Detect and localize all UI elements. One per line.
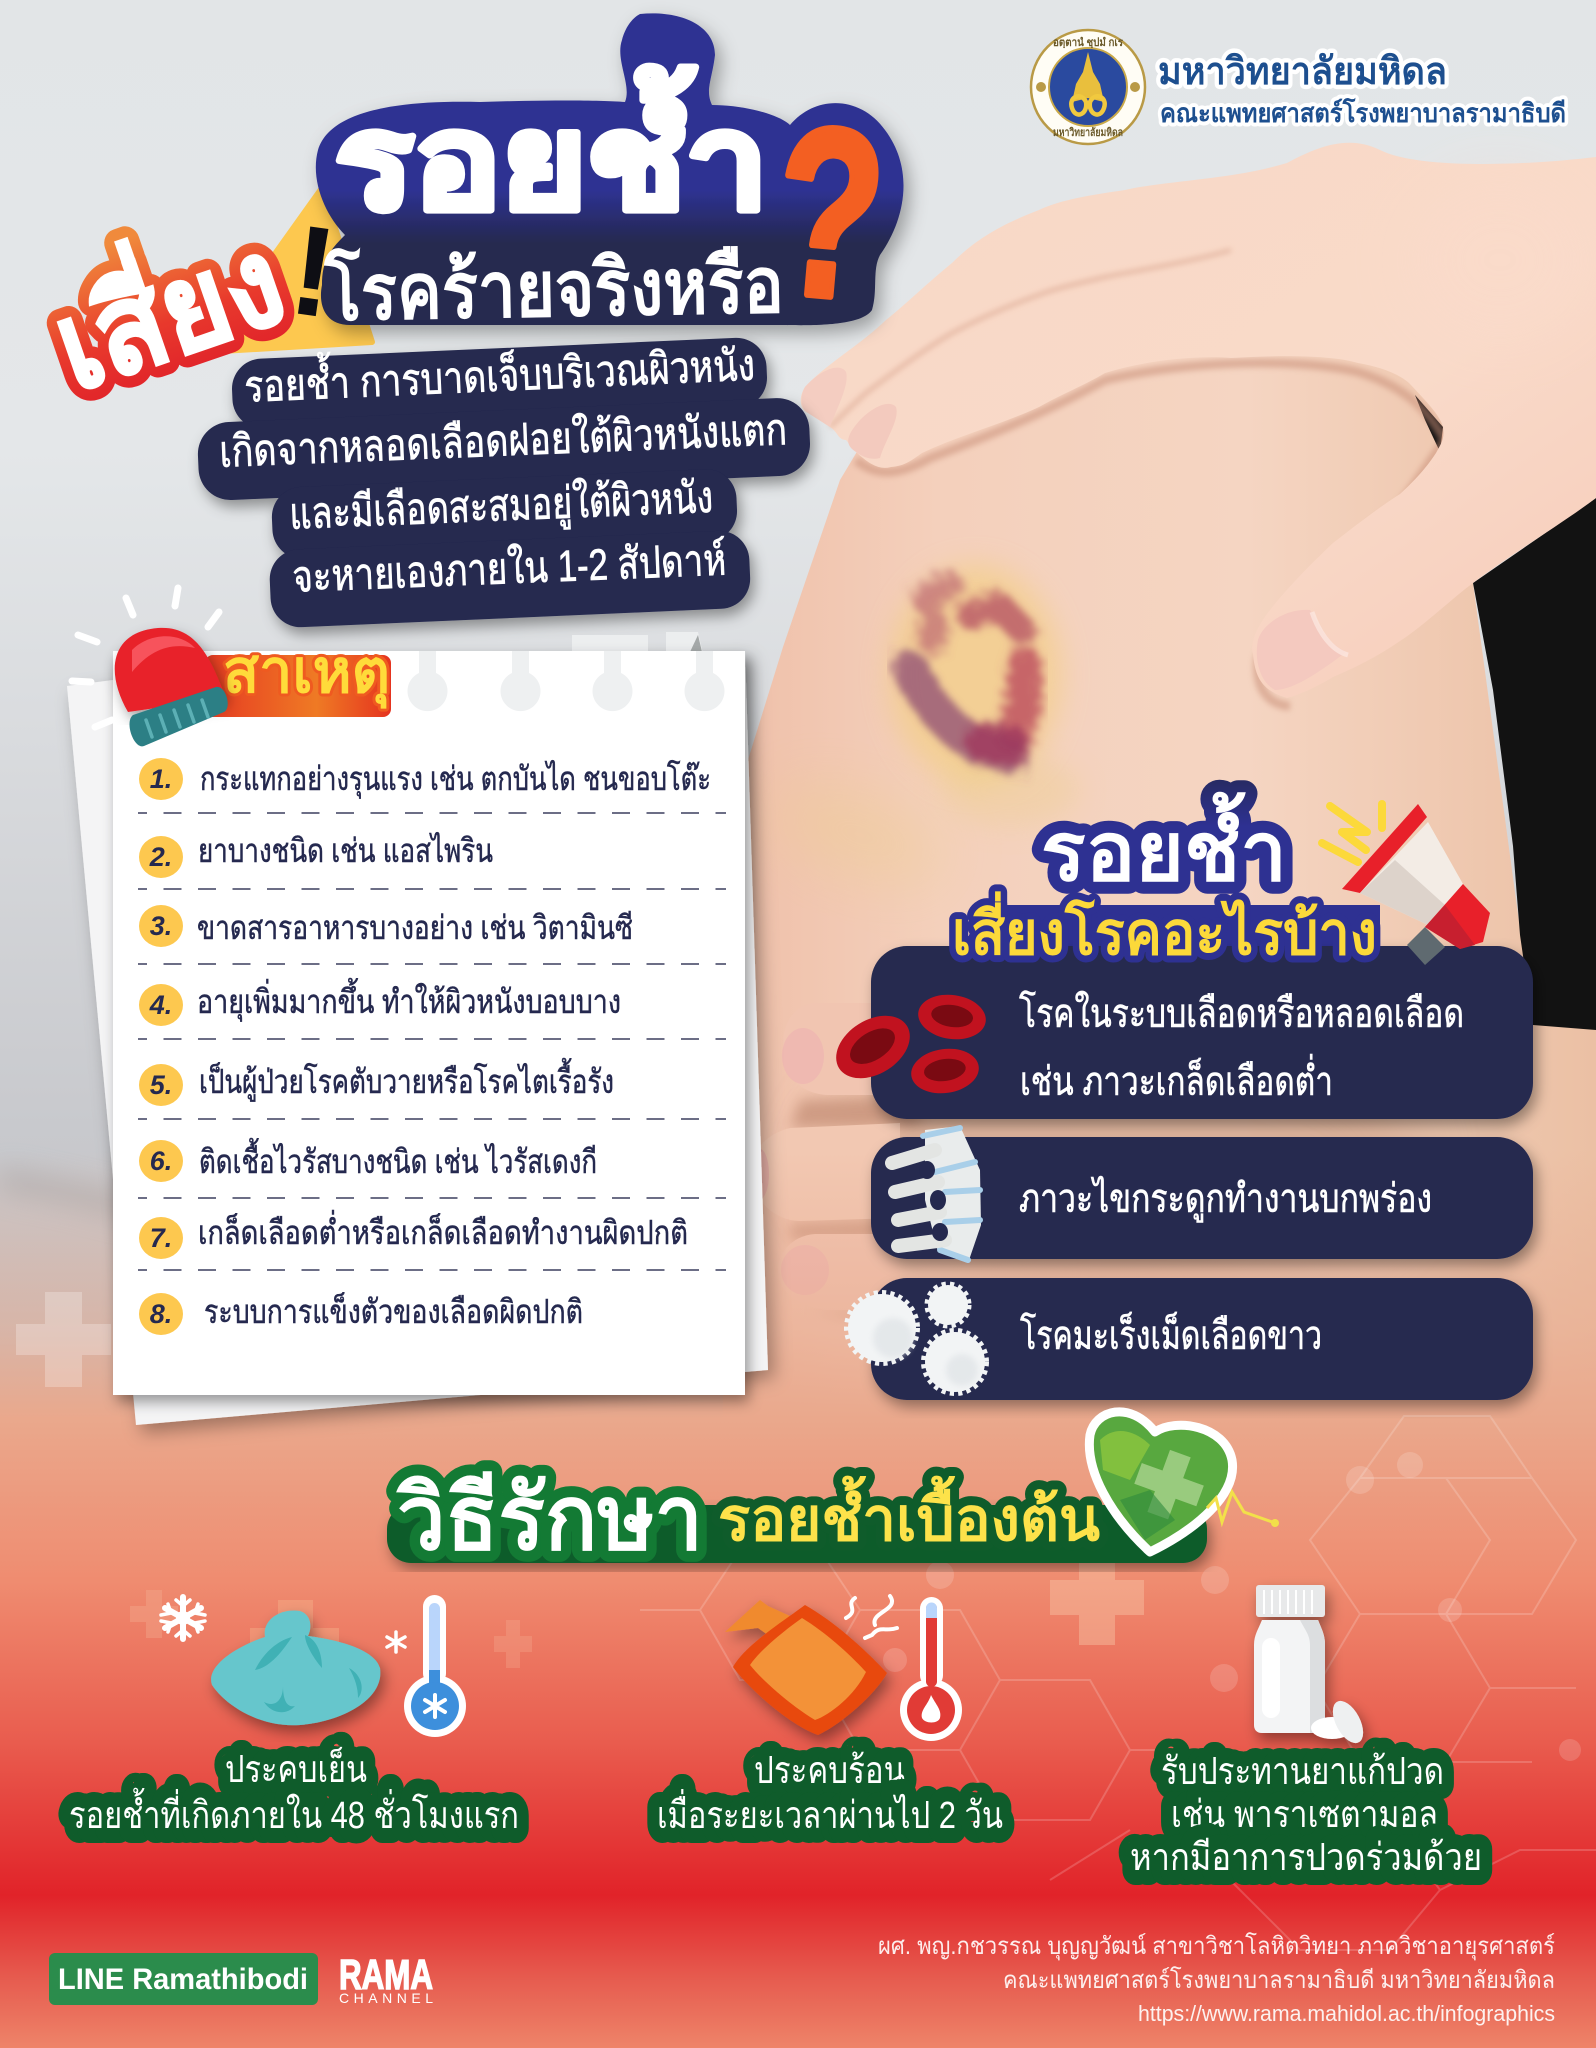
cause 2: 2. [149, 842, 172, 872]
causes heading with siren [72, 588, 391, 746]
heading: risk diseases [952, 791, 1377, 967]
university name [1158, 51, 1566, 128]
cause 3: 3. [150, 911, 172, 941]
hot label: ประคบร้อน [754, 1750, 905, 1792]
footer: LINE badge [49, 1953, 318, 2005]
footer: credits: ผศ. พญ.กชวรรณ บุญญวัฒน์ สาขาวิชาโลหิตวิทยา ภาควิชาอายุรศาสตร์ [878, 1932, 1555, 1961]
icon: siren [72, 588, 228, 746]
cause 7 [139, 1210, 688, 1259]
cause 5: เป็นผู้ป่วยโรคตับวายหรือโรคไตเรื้อรัง [199, 1058, 614, 1102]
footer: credits [878, 1932, 1555, 2026]
cause 7: 7. [150, 1223, 172, 1253]
punched holes [408, 651, 724, 711]
cause 8: ระบบการแข็งตัวของเลือดผิดปกติ [204, 1292, 583, 1330]
title backing block [316, 13, 904, 325]
bruise [762, 565, 1080, 903]
heading: risk diseases: รอยช้ำ [1041, 791, 1287, 898]
title: รอยช้ำ: รอยช้ำ [335, 65, 768, 236]
heading backing: risk diseases [960, 905, 1380, 960]
treatment: hot compress [657, 1596, 1003, 1837]
panel: disease 2 bone marrow [871, 1126, 1533, 1263]
icon: steam [846, 1596, 897, 1638]
medicine label: รับประทานยาแก้ปวด [1161, 1751, 1444, 1793]
treatment: pain medicine [1130, 1585, 1482, 1879]
heading: risk diseases: เสี่ยงโรคอะไรบ้าง [952, 891, 1377, 967]
cause 6 [139, 1138, 597, 1182]
intro paragraph: รอยช้ำ การบาดเจ็บบริเวณผิวหนัง [243, 333, 756, 412]
title: โรคร้ายจริงหรือ: โรคร้ายจริงหรือ [323, 239, 785, 337]
icon: medicine bottle and pills [1254, 1585, 1369, 1748]
bottom colour gradient overlay [0, 1150, 1596, 2048]
photo: leg with bruise [720, 143, 1596, 1500]
icon: snowflakes [161, 1597, 405, 1652]
cause 6: ติดเชื้อไวรัสบางชนิด เช่น ไวรัสเดงกี [199, 1138, 597, 1180]
icon: ice bag [211, 1611, 380, 1725]
intro paragraph [197, 333, 811, 628]
intro paragraph: เกิดจากหลอดเลือดฝอยใต้ผิวหนังแตก [218, 404, 788, 477]
cause 5 [139, 1058, 614, 1106]
footer: credits: คณะแพทยศาสตร์โรงพยาบาลรามาธิบดี มหาวิทยาลัยมหิดล [1003, 1966, 1555, 1994]
lower fingers [751, 1003, 920, 1325]
decorative medical pattern [16, 1292, 1596, 1950]
cause 1: กระแทกอย่างรุนแรง เช่น ตกบันได ชนขอบโต๊ะ [200, 760, 711, 799]
panel: disease 3 leukemia: โรคมะเร็งเม็ดเลือดขาว [1020, 1311, 1322, 1358]
panel: disease 1 blood: เช่น ภาวะเกล็ดเลือดต่ำ [1020, 1054, 1333, 1104]
intro paragraph: จะหายเองภายใน 1-2 สัปดาห์ [291, 535, 727, 602]
icon: hot water bottle [725, 1600, 887, 1735]
cold label [69, 1746, 519, 1837]
front sheet [113, 651, 745, 1395]
medicine label: เช่น พาราเซตามอล [1171, 1794, 1438, 1836]
panel: disease 2 bone marrow: ภาวะไขกระดูกทำงานบกพร่อง [1019, 1176, 1432, 1222]
footer: RAMA channel logo: RAMA [339, 1951, 433, 1998]
footer: RAMA channel logo: CHANNEL [339, 1990, 433, 2006]
hot label [657, 1750, 1003, 1837]
cold label: รอยช้ำที่เกิดภายใน 48 ชั่วโมงแรก [69, 1787, 519, 1837]
cause 7: เกล็ดเลือดต่ำหรือเกล็ดเลือดทำงานผิดปกติ [198, 1210, 688, 1251]
cause 4: อายุเพิ่มมากขึ้น ทำให้ผิวหนังบอบบาง [197, 978, 621, 1022]
cause 4 [139, 978, 621, 1026]
cause 3: ขาดสารอาหารบางอย่าง เช่น วิตามินซี [197, 909, 633, 946]
icon: spine [892, 1126, 981, 1263]
icon: red blood cells [825, 990, 989, 1098]
icon: hot thermometer [900, 1597, 962, 1741]
cause 1: 1. [150, 764, 172, 794]
title: question mark: ? [765, 75, 894, 351]
heading: first aid: วิธีรักษา [396, 1469, 703, 1569]
intro paragraph: และมีเลือดสะสมอยู่ใต้ผิวหนัง [288, 472, 714, 541]
cause 8 [139, 1292, 583, 1335]
icon: Mahidol seal: มหาวิทยาลัยมหิดล [1053, 126, 1123, 139]
cause 1 [139, 758, 711, 800]
cold label: ประคบเย็น [225, 1746, 367, 1791]
footer: LINE badge: LINE Ramathibodi [58, 1963, 308, 1996]
black clothing [1473, 498, 1596, 1030]
treatment: cold compress [69, 1595, 519, 1837]
icon: Mahidol seal [1031, 30, 1145, 144]
cause 8: 8. [150, 1299, 172, 1329]
title: เสี่ยง: เสี่ยง [33, 196, 300, 416]
heading: first aid: รอยช้ำเบื้องต้น [718, 1475, 1100, 1553]
footer: RAMA channel logo [339, 1951, 433, 2006]
cause 3 [139, 905, 633, 947]
cause 6: 6. [150, 1146, 172, 1176]
university name: มหาวิทยาลัยมหิดล [1158, 51, 1447, 93]
heading banner: สาเหตุ [223, 638, 390, 709]
icon: Mahidol seal: อตฺตานํ ชฺปมํ กเร [1053, 36, 1123, 49]
cause 2 [139, 832, 493, 878]
icon: warning triangle: ! [282, 198, 344, 346]
title: เสี่ยง: เสี่ยง [33, 196, 300, 416]
cause 5: 5. [150, 1070, 172, 1100]
icon: warning triangle [205, 188, 372, 352]
icon: green heart [1089, 1412, 1279, 1552]
footer: credits: https://www.rama.mahidol.ac.th/infographics [1138, 2001, 1555, 2026]
medicine label: หากมีอาการปวดร่วมด้วย [1130, 1837, 1482, 1879]
cause 2: ยาบางชนิด เช่น แอสไพริน [198, 832, 493, 869]
icon: cold thermometer [404, 1595, 466, 1737]
cause 4: 4. [149, 990, 172, 1020]
header: university logo [1031, 30, 1566, 144]
panel: disease 1 blood [825, 946, 1533, 1119]
hot label: เมื่อระยะเวลาผ่านไป 2 วัน [657, 1789, 1003, 1837]
panel: disease 1 blood: โรคในระบบเลือดหรือหลอดเลือด [1019, 990, 1464, 1036]
back sheets [67, 651, 768, 1425]
panel: causes note paper [67, 632, 768, 1425]
university name: คณะแพทยศาสตร์โรงพยาบาลรามาธิบดี [1160, 97, 1566, 128]
icon: white blood cells [848, 1285, 985, 1392]
icon: megaphone [1322, 804, 1490, 965]
medicine label [1130, 1751, 1482, 1879]
panel: disease 3 leukemia [848, 1278, 1533, 1400]
hand on knee [801, 143, 1596, 706]
heading: first aid [387, 1469, 1207, 1569]
title block [33, 13, 904, 416]
dashed dividers [138, 813, 726, 1270]
